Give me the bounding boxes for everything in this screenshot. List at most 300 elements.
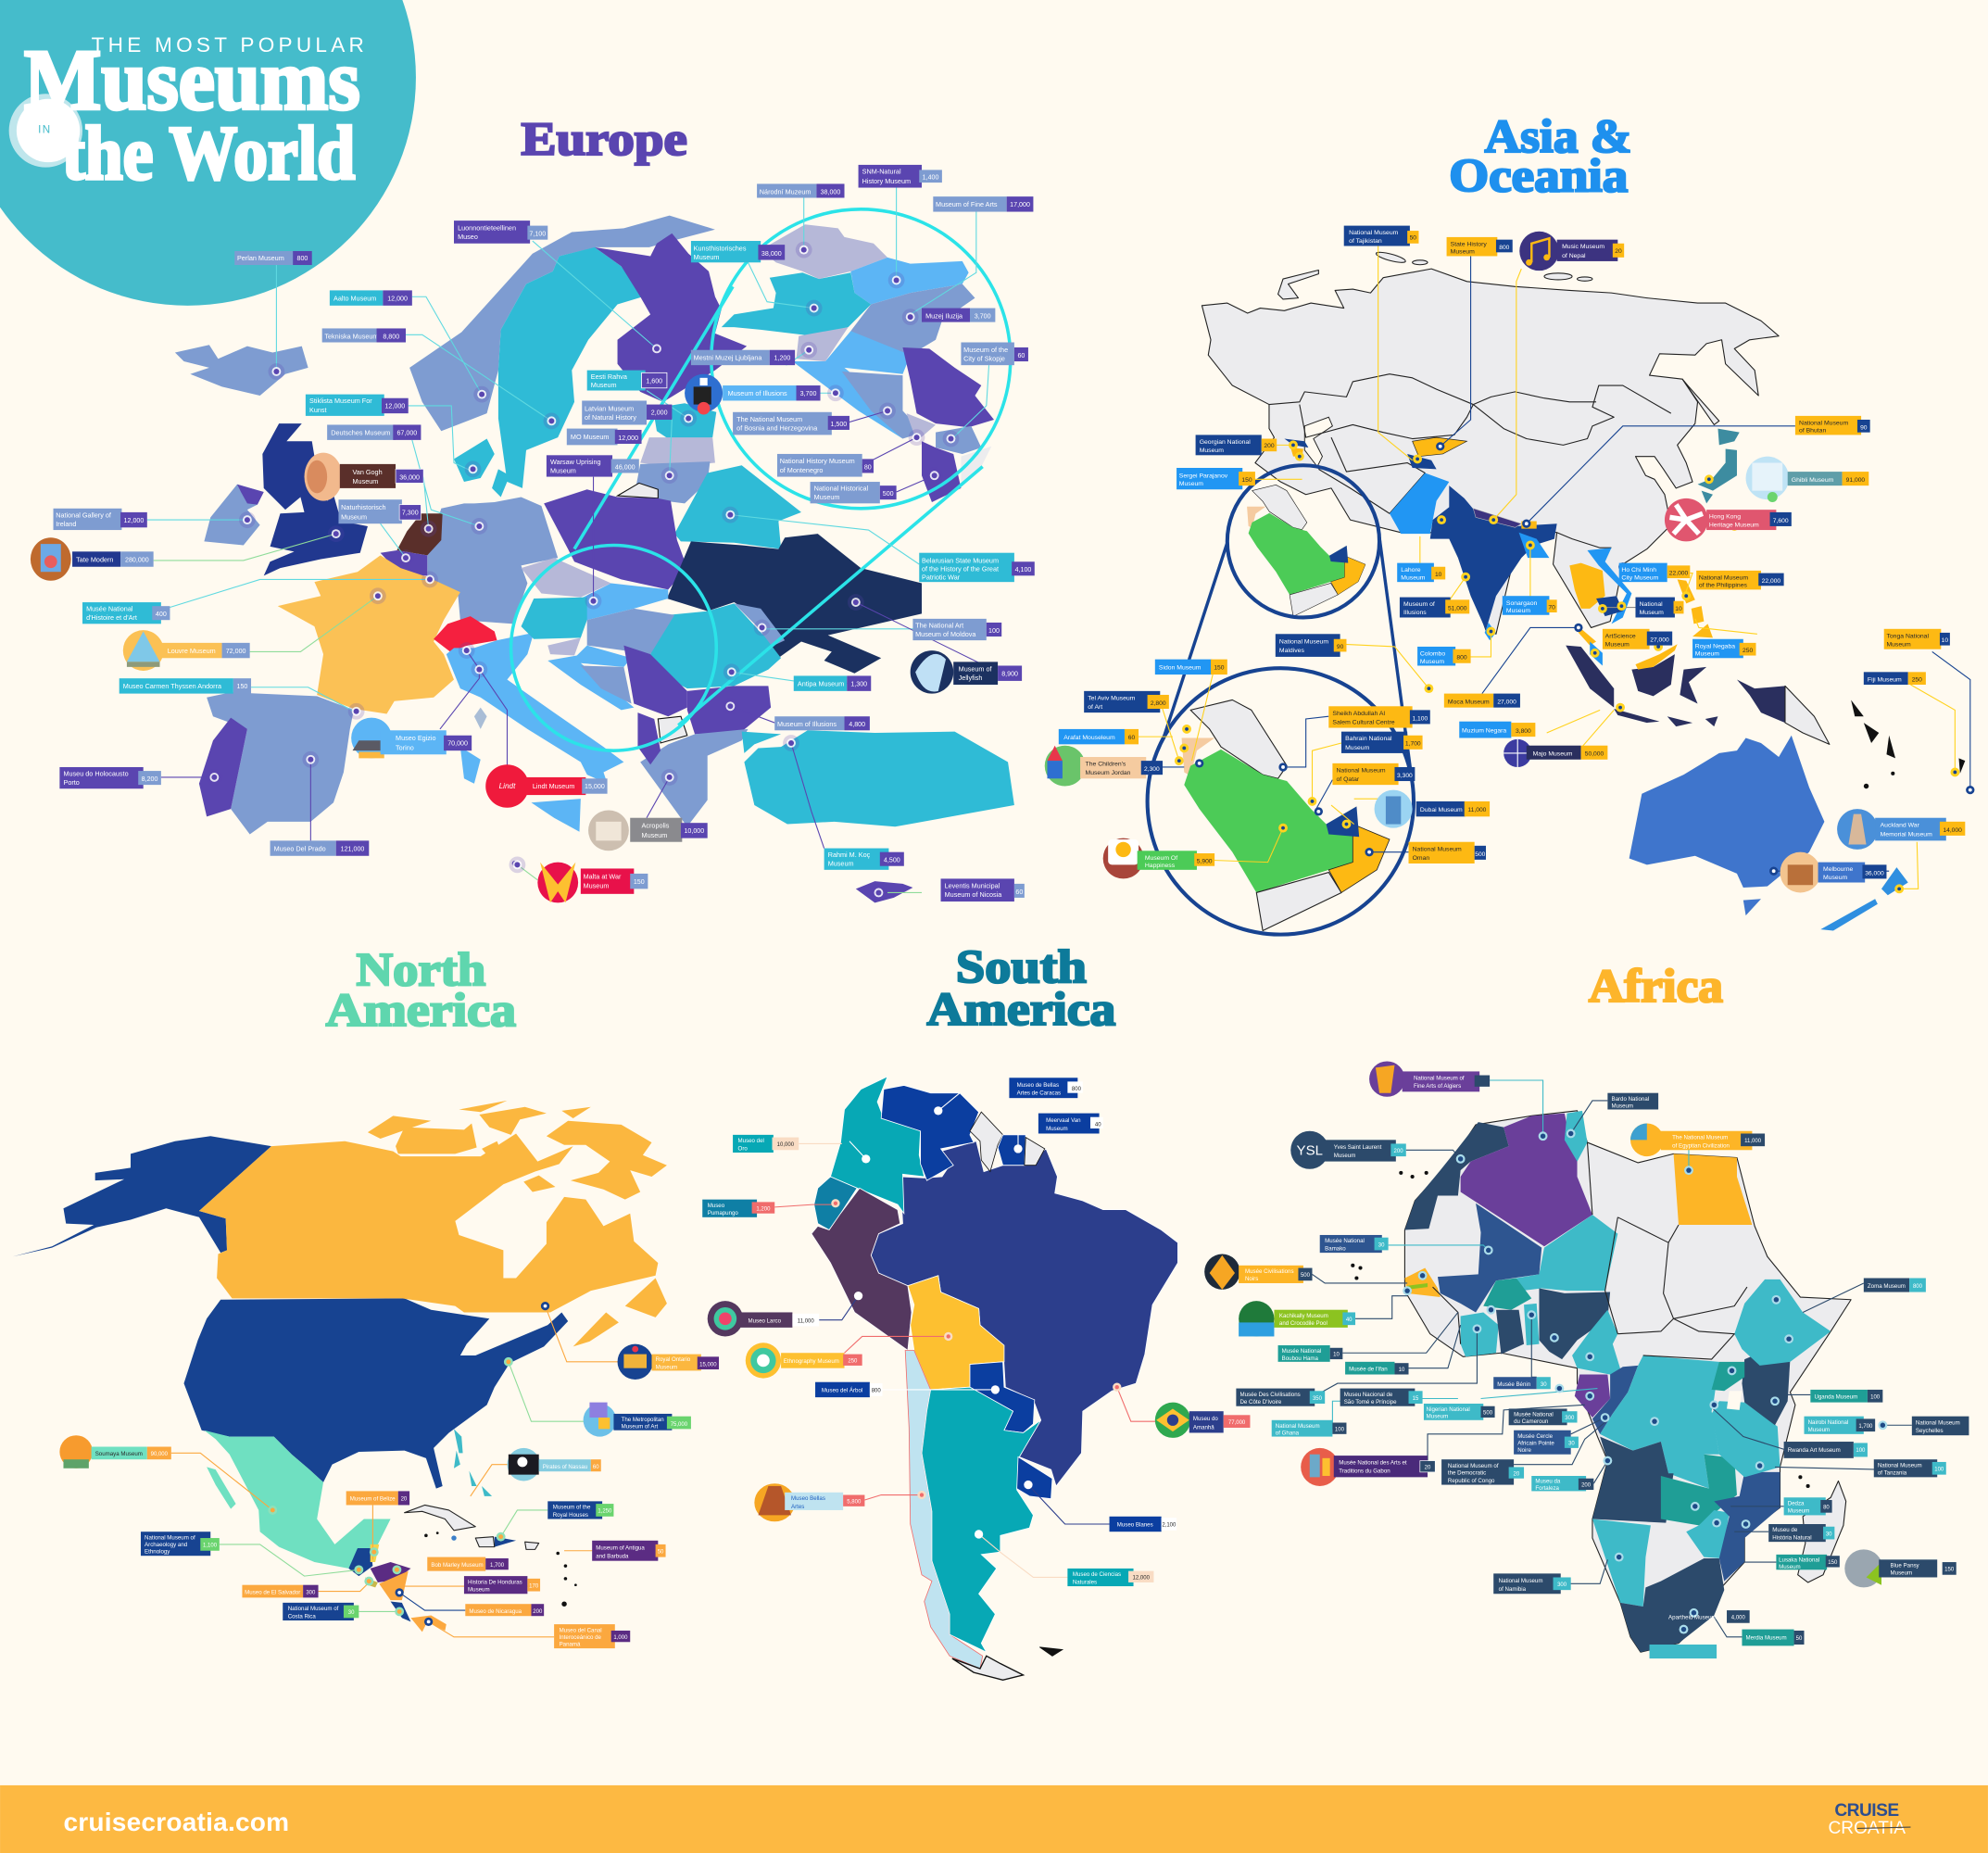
- title badge: [0, 0, 416, 306]
- label: National Museum of the Democratic Republic of Congo: Republic of Congo: [1448, 1478, 1495, 1484]
- label: National Gallery of Ireland: National Gallery of: [56, 511, 112, 519]
- label: Bob Marley Museum: Bob Marley Museum: [431, 1562, 484, 1569]
- label: Museum of Jellyfish icon and tag: Jellyfish: [959, 674, 982, 682]
- label: Musée National d'Histoire et d'Art: d'Histoire et d'Art: [86, 613, 137, 622]
- label: National Museum of Qatar: 3,300: [1397, 773, 1413, 779]
- label: The Metropolitan Museum of Art icon and tag: The Metropolitan: [622, 1417, 664, 1423]
- label: Museo de El Salvador: 300: [306, 1590, 316, 1595]
- label: Acropolis Museum icon and tag: 10,000: [684, 827, 704, 835]
- label: Museum of Illusions Delhi: Illusions: [1403, 610, 1427, 616]
- label: Blue Pansy Museum icon and tag: 150: [1944, 1568, 1955, 1573]
- label: Antipa Museum: 1,300: [850, 680, 867, 687]
- leader lines: Asia: [1125, 246, 1970, 889]
- label: Ethnography Museum icon and tag: 250: [848, 1359, 858, 1365]
- label: Museu de História Natural: [1768, 1524, 1834, 1542]
- label: National Museum of Namibia: National Museum: [1499, 1578, 1542, 1584]
- label: National Museum of Fine Arts of Algiers icon and tag: [1369, 1061, 1490, 1097]
- label: Museo Blanes: 2,100: [1162, 1523, 1176, 1529]
- label: Music Museum of Nepal icon and tag: Music Museum: [1562, 244, 1604, 250]
- label: Sonargaon Museum: [1503, 596, 1557, 615]
- label: Lusaka National Museum: Lusaka National: [1779, 1557, 1819, 1563]
- label: Museo de Bellas Artes de Caracas: Museo de Bellas: [1017, 1082, 1059, 1089]
- label: National Historical Museum: National Historical: [814, 485, 868, 493]
- label: Pirates of Nassau icon and tag: [507, 1448, 601, 1481]
- label: Ghibli Museum icon and tag: 91,000: [1846, 477, 1865, 484]
- heading: South America: [926, 941, 1115, 1035]
- footer band: [0, 1785, 1988, 1853]
- label: The National Museum of Bosnia and Herzegovina: 1,500: [830, 421, 847, 428]
- label: National Museum of Costa Rica: Costa Rica: [288, 1613, 316, 1620]
- label: National Museum Maldives: [1276, 634, 1346, 657]
- label: National Museum of Tajikistan: 50: [1410, 235, 1416, 242]
- label: Kachikally Museum and Crocodile Pool icon and tag: [1239, 1301, 1355, 1336]
- label: Musée de l'Ifan: Musée de l'Ifan: [1349, 1366, 1388, 1372]
- label: Colombo Museum: [1417, 647, 1471, 665]
- label: Musée Bénin: Musée Bénin: [1497, 1381, 1531, 1388]
- label: Acropolis Museum icon and tag: Museum: [642, 831, 667, 839]
- label: Royal Ontario Museum icon and tag: Royal Ontario: [656, 1356, 691, 1363]
- label: National Museum of the Philippines: 22,000: [1762, 578, 1780, 585]
- label: State History Museum: 800: [1499, 245, 1510, 251]
- label: Museo del Canal Interoceánico de Panamá: [554, 1624, 630, 1648]
- label: Museu Nacional de São Tomé e Príncipe: São Tomé e Príncipe: [1344, 1399, 1397, 1406]
- label: Yves Saint Laurent Museum icon and tag: [1290, 1131, 1406, 1169]
- label: Majo Museum icon and tag: 50,000: [1585, 751, 1604, 758]
- label: National Historical Museum: [811, 482, 897, 503]
- label: empty teal tag: [1650, 1645, 1717, 1658]
- label: National Gallery of Ireland: [54, 509, 147, 530]
- leader lines: Africa: [1313, 1080, 1937, 1637]
- label: Musée National d'Histoire et d'Art: [82, 602, 170, 624]
- label: Museo Bellas Artes icon and tag: [754, 1483, 864, 1521]
- label: Auckland War Memorial Museum icon and tag: [1837, 809, 1965, 850]
- label: National Museum of Bhutan: of Bhutan: [1799, 428, 1826, 435]
- label: Dedza Museum: 80: [1823, 1506, 1830, 1511]
- label: Lindt Museum icon and tag: Lindt Museum: [533, 782, 574, 790]
- label: Tekniska Museum: 8,800: [383, 333, 399, 340]
- label: Museo de Bellas Artes de Caracas: 800: [1072, 1087, 1082, 1092]
- label: Royal Ontario Museum icon and tag: [618, 1344, 719, 1380]
- label: Musée National du Cameroun: du Cameroun: [1514, 1418, 1549, 1425]
- label: The National Museum of Egyptian Civilization icon and tag: The National Museum: [1672, 1135, 1728, 1141]
- label: Apartheid Museum: 4,000: [1731, 1616, 1746, 1621]
- label: The National Art Museum of Moldova: 100: [988, 627, 1000, 635]
- label: National Museum of Bhutan: National Museum: [1799, 420, 1848, 426]
- label: Merdia Museum: [1742, 1630, 1805, 1645]
- label: Museu do Holocausto Porto: Porto: [63, 778, 80, 787]
- label: The Children's Museum Jordan icon and tag: 2,300: [1144, 766, 1160, 773]
- label: Stiftelsen Museum For Kunst: [306, 395, 409, 416]
- label: Musée National des Arts et Traditions du Gabon icon and tag: Musée National des Arts et: [1339, 1460, 1407, 1467]
- label: National Museum of Archaeology and Ethnology: Archaeology and: [145, 1542, 188, 1548]
- label: SNM-Natural History Museum: History Museum: [862, 177, 911, 185]
- label: National Museum of Namibia: of Namibia: [1499, 1586, 1527, 1593]
- label: Mestni Muzej Ljubljana: Mestni Muzej Ljubljana: [694, 354, 762, 362]
- label: Van Gogh Museum icon and tag: 36,000: [399, 473, 420, 481]
- label: Perlan Museum: [234, 251, 312, 265]
- map: South America countries: [812, 1077, 1177, 1680]
- heading: Asia & Oceania: [1449, 110, 1631, 202]
- label: Warsaw Uprising Museum: Warsaw Uprising: [550, 458, 601, 466]
- label: Museo de Nicaragua: Museo de Nicaragua: [469, 1608, 522, 1615]
- label: Museo Larco icon and tag: [708, 1301, 819, 1336]
- label: State History Museum: State History: [1451, 241, 1487, 247]
- label: Deutsches Museum: 67,000: [396, 429, 417, 436]
- label: Museu da Fortaleza: 200: [1581, 1483, 1592, 1489]
- label: Musée Des Civilisations De Côte D'Ivoire: 350: [1313, 1396, 1323, 1402]
- label: Museo del Oro: 10,000: [777, 1142, 795, 1148]
- panel: Europe: [31, 113, 1035, 902]
- label: Kachikally Museum and Crocodile Pool icon and tag: and Crocodile Pool: [1279, 1320, 1327, 1327]
- label: Bardo National Museum: Bardo National: [1611, 1096, 1649, 1103]
- label: National Museum of Fine Arts of Algiers icon and tag: Fine Arts of Algiers: [1414, 1083, 1461, 1090]
- label: Warsaw Uprising Museum: Museum: [550, 466, 576, 474]
- label: Museu Nacional de São Tomé e Príncipe: 15: [1413, 1396, 1419, 1402]
- label: Ethnography Museum icon and tag: [746, 1342, 862, 1379]
- label: Ho Chi Minh City Museum: [1619, 563, 1690, 582]
- label: Tekniska Museum: Tekniska Museum: [324, 332, 378, 340]
- label: Nigerian National Museum: 500: [1483, 1411, 1493, 1417]
- label: State History Museum: Museum: [1451, 249, 1475, 256]
- label: Muzium Negara: 3,800: [1516, 728, 1531, 735]
- label: Malta at War Museum icon and tag: [537, 863, 648, 902]
- label: The Children's Museum Jordan icon and tag: [1045, 746, 1163, 787]
- heading: Europe: Europe: [522, 113, 687, 165]
- label: Museo Del Prado: 121,000: [341, 845, 364, 852]
- label: Muzej Iluzija: Muzej Iluzija: [925, 312, 963, 321]
- zoomed Balkans: [761, 224, 887, 279]
- label: National Museum Maldives: National Museum: [1279, 639, 1328, 646]
- label: Musée Civilisations Noirs icon and tag: 500: [1301, 1273, 1311, 1279]
- label: Museo del Arbol: [815, 1382, 883, 1397]
- label: Museu da Fortaleza: [1531, 1476, 1593, 1492]
- heading: North America: America: [326, 984, 516, 1036]
- label: National Museum of the Philippines: [1696, 571, 1784, 589]
- label: Kachikally Museum and Crocodile Pool icon and tag: Kachikally Museum: [1279, 1313, 1328, 1319]
- label: Museum of Jellyfish icon and tag: Museum of: [959, 665, 993, 674]
- label: Museum Of Happiness icon and tag: 5,900: [1197, 858, 1213, 864]
- label: Van Gogh Museum icon and tag: Museum: [353, 477, 378, 485]
- map: Europe countries: [175, 216, 1014, 902]
- label: Naturhistorisch Museum: Naturhistorisch: [341, 503, 386, 511]
- label: Moca Museum: Moca Museum: [1448, 700, 1490, 706]
- label: The National Museum of Egyptian Civilization icon and tag: [1630, 1124, 1765, 1156]
- label: Blue Pansy Museum icon and tag: Blue Pansy: [1891, 1563, 1920, 1569]
- label: National Museum Cambodia: Museum: [1640, 610, 1664, 616]
- label: Musée Civilisations Noirs icon and tag: Noirs: [1245, 1276, 1258, 1282]
- label: Antipa Museum: Antipa Museum: [798, 679, 844, 687]
- label: Latvian Museum of Natural History: Latvian Museum: [585, 404, 634, 412]
- label: Dedza Museum: Dedza: [1788, 1500, 1805, 1506]
- label: Lusaka National Museum: Museum: [1779, 1564, 1801, 1570]
- label: Museu de História Natural: História Natural: [1772, 1534, 1812, 1541]
- label: Museo Egizio Torino icon and tag: [351, 718, 472, 758]
- label: The Children's Museum Jordan icon and tag: Museum Jordan: [1086, 770, 1131, 776]
- label: Deutsches Museum: Deutsches Museum: [331, 428, 390, 436]
- label: Nigerian National Museum: Museum: [1427, 1414, 1448, 1420]
- label: Rwanda Art Museum: Rwanda Art Museum: [1788, 1447, 1841, 1454]
- label: Museum of Antigua and Barbuda: and Barbuda: [596, 1553, 629, 1559]
- label: Historia De Honduras Museum: [464, 1576, 540, 1594]
- label: SNM-Natural History Museum: SNM-Natural: [862, 167, 901, 175]
- heading: South America: America: [926, 983, 1115, 1035]
- label: Museum of Illusions icon and tag: Museum of Illusions: [728, 389, 787, 397]
- label: Luonnontieteellinen Museo: 7,100: [529, 231, 546, 238]
- label: Belarusian State Museum: 4,100: [1015, 566, 1031, 574]
- label: Music Museum of Nepal icon and tag: 20: [1615, 248, 1622, 255]
- label: Rahmi M. Koç Museum: [824, 849, 904, 870]
- label: Musée National du Cameroun: [1509, 1408, 1578, 1425]
- label: Hong Kong Heritage Museum icon and tag: Heritage Museum: [1709, 523, 1759, 529]
- label: Leventis Municipal Museum of Nicosia: Museum of Nicosia: [945, 890, 1002, 899]
- label: Museum of Illusions icon and tag: 3,700: [800, 390, 816, 397]
- label: Meervaal Van Museum: Meervaal Van: [1046, 1117, 1081, 1124]
- label: Tonga National Museum: 10: [1942, 637, 1948, 644]
- label: Musée Cercle Africain Pointe Noire: [1514, 1431, 1579, 1455]
- panel: South America: [702, 941, 1250, 1680]
- label: Museo Pumapungo: Museo: [708, 1203, 725, 1209]
- label: Nairobi National Museum: Nairobi National: [1808, 1419, 1848, 1426]
- label: Museu do Holocausto Porto: 8,200: [142, 775, 157, 783]
- label: ArtScience Museum: 27,000: [1650, 637, 1669, 643]
- label: National Gallery of Ireland: 12,000: [124, 517, 144, 524]
- label: National Museum Cambodia: 10: [1675, 606, 1682, 612]
- label: Eesti Rahva Museum: Eesti Rahva: [591, 372, 628, 381]
- label: Museo Larco icon and tag: 11,000: [798, 1318, 814, 1324]
- label: Musée Des Civilisations De Côte D'Ivoire: [1236, 1389, 1325, 1406]
- label: National Museum of Archaeology and Ethnology: [141, 1532, 220, 1556]
- label: Sheikh Abdullah Al Salem Cultural Centre: Sheikh Abdullah Al: [1332, 711, 1385, 717]
- label: Tate Modern icon and tag: 280,000: [125, 556, 149, 563]
- label: Royal Negaba Museum: Museum: [1695, 651, 1719, 658]
- label: Lahore Museum: [1397, 563, 1445, 582]
- label: Ghibli Museum icon and tag: Ghibli Museum: [1792, 477, 1834, 484]
- label: Sheikh Abdullah Al Salem Cultural Centre: [1328, 706, 1430, 728]
- label: Museu do Holocausto Porto: [59, 767, 161, 788]
- label: Stiftelsen Museum For Kunst: Kunst: [309, 406, 327, 414]
- label: National Museum Oman: Oman: [1413, 855, 1429, 862]
- label: Aalto Museum: 12,000: [387, 295, 408, 302]
- label: National Museum of Archaeology and Ethnology: 1,100: [203, 1544, 218, 1549]
- heading: South America: South: [956, 941, 1087, 993]
- label: Museo Carmen Thyssen Andorra: Museo Carmen Thyssen Andorra: [123, 682, 222, 690]
- label: Georgian National Museum: Georgian National: [1200, 439, 1251, 446]
- panel: North America: [13, 943, 719, 1648]
- label: Tel Aviv Museum of Art: Tel Aviv Museum: [1088, 695, 1136, 701]
- label: Museo de Nicaragua: [465, 1604, 544, 1616]
- label: Acropolis Museum icon and tag: Acropolis: [642, 822, 670, 830]
- label: Museo de Ciencias Naturales: [1067, 1569, 1153, 1586]
- label: Ugandan Museum: 100: [1870, 1395, 1881, 1401]
- label: Nigerian National Museum: Nigerian National: [1427, 1406, 1470, 1413]
- label: Historia De Honduras Museum: Museum: [468, 1587, 490, 1594]
- label: Museum of Belize: 20: [401, 1497, 408, 1503]
- label: Museum Of Happiness icon and tag: Happiness: [1145, 863, 1176, 869]
- label: National Museum of Archaeology and Ethnology: National Museum of: [145, 1534, 195, 1541]
- label: Museo Egizio Torino icon and tag: 70,000: [447, 740, 468, 748]
- label: Bahrain National Museum: [1341, 732, 1423, 753]
- label: ArtScience Museum: ArtScience: [1605, 633, 1636, 639]
- label: Museum of Fine Arts: 17,000: [1010, 201, 1030, 208]
- label: Museo Del Prado: [271, 840, 369, 856]
- label: Malta at War Museum icon and tag: 150: [634, 878, 645, 886]
- label: Museo de Ciencias Naturales: Naturales: [1073, 1579, 1097, 1585]
- label: National Museum of Tanzania: 100: [1934, 1468, 1944, 1473]
- label: Musée National des Arts et Traditions du Gabon icon and tag: [1301, 1448, 1435, 1486]
- label: Museo Larco icon and tag: Museo Larco: [749, 1317, 782, 1324]
- label: ArtScience Museum: [1603, 629, 1672, 649]
- label: National Museum of Ghana: [1272, 1420, 1346, 1437]
- label: Museu do Holocausto Porto: Museu do Holocausto: [63, 770, 129, 778]
- label: Museum of the City of Skopje: 60: [1017, 352, 1025, 359]
- label: ArtScience Museum: Museum: [1605, 641, 1629, 648]
- label: Sidon Museum: Sidon Museum: [1159, 665, 1202, 672]
- label: Melbourne Museum icon and tag: Melbourne: [1823, 866, 1853, 873]
- label: Muzium Negara: Muzium Negara: [1462, 727, 1506, 734]
- label: Arafat Mouseleum: Arafat Mouseleum: [1063, 735, 1115, 741]
- label: Tate Modern icon and tag: [31, 537, 154, 581]
- label: National Museum Oman: National Museum: [1413, 846, 1462, 852]
- label: Van Gogh Museum icon and tag: [305, 453, 423, 501]
- label: National Museum of Tanzania: National Museum: [1878, 1462, 1922, 1469]
- heading: North America: North: [357, 943, 485, 995]
- label: Lahore Museum: 10: [1435, 572, 1442, 578]
- label: National Museum Oman: 500: [1475, 851, 1486, 858]
- heading: Africa: Africa: [1589, 960, 1723, 1012]
- label: Merdia Museum: 50: [1796, 1636, 1803, 1642]
- label: Museo de Bellas Artes de Caracas: Artes de Caracas: [1017, 1090, 1061, 1097]
- label: Museu do Amanhã icon and tag: 77,000: [1228, 1420, 1246, 1426]
- label: Colombo Museum: 800: [1456, 655, 1467, 662]
- label: National Museum of the Democratic Republic of Congo: the Democratic: [1448, 1470, 1486, 1477]
- label: Ho Chi Minh City Museum: City Museum: [1621, 574, 1659, 581]
- label: Musée Cercle Africain Pointe Noire: Africain Pointe: [1517, 1440, 1554, 1446]
- label: Museum of Illusions Delhi: 51,000: [1448, 605, 1467, 611]
- label: National Museum of Fine Arts of Algiers icon and tag: National Museum of: [1414, 1075, 1465, 1081]
- label: National Museum of Tajikistan: of Tajikistan: [1349, 238, 1382, 245]
- label: Museo Blanes: Museo Blanes: [1117, 1522, 1153, 1529]
- label: Dubai Museum icon and tag: Dubai Museum: [1420, 807, 1463, 813]
- label: Rwanda Art Museum: 100: [1856, 1448, 1866, 1454]
- label: Museo Bellas Artes icon and tag: Artes: [791, 1504, 804, 1510]
- label: Pirates of Nassau icon and tag: 60: [593, 1465, 599, 1470]
- label: Museu de História Natural: Museu de: [1772, 1527, 1798, 1533]
- dots: Asia museum locations: [1175, 440, 1974, 893]
- label: National Historical Museum: 500: [883, 490, 894, 498]
- label: Kunsthistorisches Museum: Museum: [694, 253, 719, 261]
- label: Latvian Museum of Natural History: of Natural History: [585, 413, 636, 422]
- label: Museo Blanes: [1110, 1517, 1176, 1532]
- label: National History Museum of Montenegro: 80: [864, 463, 872, 471]
- dots: Europe museum locations: [206, 242, 959, 901]
- label: Dubai Museum icon and tag: 11,000: [1467, 807, 1487, 813]
- label: Museo de El Salvador: [242, 1585, 319, 1597]
- label: Museum of the Royal Houses: Museum of the: [553, 1505, 591, 1511]
- title badge: the World: [62, 111, 355, 195]
- label: Museo de Nicaragua: 200: [533, 1609, 543, 1615]
- label: Musée National du Cameroun: 300: [1565, 1416, 1575, 1421]
- label: The Metropolitan Museum of Art icon and tag: Museum of Art: [622, 1424, 659, 1431]
- label: The National Museum of Egyptian Civilization icon and tag: 11,000: [1744, 1139, 1762, 1144]
- label: The National Museum of Bosnia and Herzegovina: of Bosnia and Herzegovina: [736, 424, 818, 433]
- label: Fiji Museum: Fiji Museum: [1868, 677, 1902, 684]
- label: Sergei Parajanov Museum: Museum: [1179, 481, 1203, 487]
- label: Nairobi National Museum: [1805, 1417, 1875, 1434]
- label: Colombo Museum: Colombo: [1420, 651, 1445, 658]
- label: Perlan Museum: 800: [297, 255, 308, 262]
- label: The National Museum of Bosnia and Herzegovina: The National Museum: [736, 415, 802, 423]
- label: Musée National Boubou Hama: 10: [1333, 1353, 1340, 1358]
- label: Museum of Illusions icon and tag: [685, 374, 821, 415]
- map: Africa countries: [1351, 1111, 1851, 1652]
- label: Lusaka National Museum: [1776, 1555, 1840, 1570]
- label: Luonnontieteellinen Museo: Luonnontieteellinen: [458, 223, 516, 232]
- label: Louvre Museum icon and tag: [123, 630, 250, 671]
- label: Muzej Iluzija: [922, 309, 995, 322]
- heading: Asia & Oceania: Asia &: [1485, 110, 1631, 162]
- label: National Museum of Costa Rica: 30: [348, 1610, 355, 1616]
- label: SNM-Natural History Museum: 1,400: [923, 174, 939, 182]
- label: Museo del Arbol: Museo del Árbol: [822, 1388, 862, 1394]
- label: Belarusian State Museum: Belarusian State Museum: [922, 557, 999, 565]
- label: Naturhistorisch Museum: [338, 499, 421, 523]
- label: Museum of Belize: Museum of Belize: [350, 1496, 396, 1503]
- label: Leventis Municipal Museum of Nicosia: [941, 878, 1025, 901]
- label: Tate Modern icon and tag: Tate Modern: [76, 555, 113, 563]
- label: Hong Kong Heritage Museum icon and tag: [1665, 498, 1792, 541]
- label: Belarusian State Museum: Patriotic War: [922, 573, 961, 581]
- label: Museum of Illusions Bucharest: [774, 716, 870, 730]
- label: Royal Ontario Museum icon and tag: Museum: [656, 1364, 677, 1370]
- label: Musée Bénin: [1493, 1377, 1551, 1389]
- label: Musée de l'Ifan: 10: [1399, 1368, 1405, 1373]
- label: Malta at War Museum icon and tag: Museum: [584, 882, 609, 890]
- label: Sheikh Abdullah Al Salem Cultural Centre: 1,100: [1412, 715, 1428, 722]
- label: Kunsthistorisches Museum: 38,000: [761, 250, 782, 258]
- label: Museo Carmen Thyssen Andorra: 150: [237, 683, 247, 690]
- label: Musée National Boubou Hama: [1278, 1345, 1342, 1362]
- label: Museum of Antigua and Barbuda: 50: [658, 1549, 664, 1555]
- label: Stiftelsen Museum For Kunst: Stiklista Museum For: [309, 397, 372, 405]
- label: Sergei Parajanov Museum: Sergei Parajanov: [1179, 473, 1228, 479]
- label: National Museum Maldives: Maldives: [1279, 648, 1304, 654]
- label: National Museum of Tanzania: [1874, 1459, 1946, 1477]
- label: Georgian National Museum: [1196, 435, 1277, 455]
- label: Warsaw Uprising Museum: 46,000: [615, 463, 635, 471]
- label: Ugandan Museum: Uganda Museum: [1814, 1394, 1857, 1401]
- label: MO Museum: MO Museum: [571, 433, 609, 441]
- label: Tonga National Museum: [1884, 629, 1950, 649]
- label: Museo del Canal Interoceánico de Panamá: Interoceánico de: [560, 1634, 602, 1641]
- label: Musée National d'Histoire et d'Art: Musée National: [86, 605, 133, 613]
- label: Lahore Museum: Lahore: [1401, 567, 1421, 574]
- label: National Museum of Bhutan: 90: [1860, 424, 1868, 431]
- label: The National Art Museum of Moldova: The National Art: [915, 621, 963, 629]
- label: Melbourne Museum icon and tag: 36,000: [1865, 870, 1884, 876]
- label: Museo Pumapungo: 1,200: [756, 1206, 771, 1212]
- label: National Museum Cambodia: [1635, 598, 1683, 617]
- map: North America countries: [13, 1101, 667, 1632]
- label: The National Museum of Egyptian Civilization icon and tag: of Egyptian Civilization: [1672, 1143, 1730, 1150]
- label: Moca Museum: [1444, 694, 1520, 708]
- label: Perlan Museum: Perlan Museum: [237, 254, 284, 262]
- label: Sergei Parajanov Museum: 150: [1241, 477, 1252, 484]
- label: Tel Aviv Museum of Art: [1084, 691, 1169, 712]
- label: The National Museum of Bosnia and Herzegovina: [733, 412, 849, 435]
- label: Yves Saint Laurent Museum icon and tag: Museum: [1334, 1153, 1355, 1159]
- label: Georgian National Museum: 200: [1264, 443, 1275, 449]
- label: Apartheid Museum: Apartheid Museum: [1668, 1615, 1717, 1621]
